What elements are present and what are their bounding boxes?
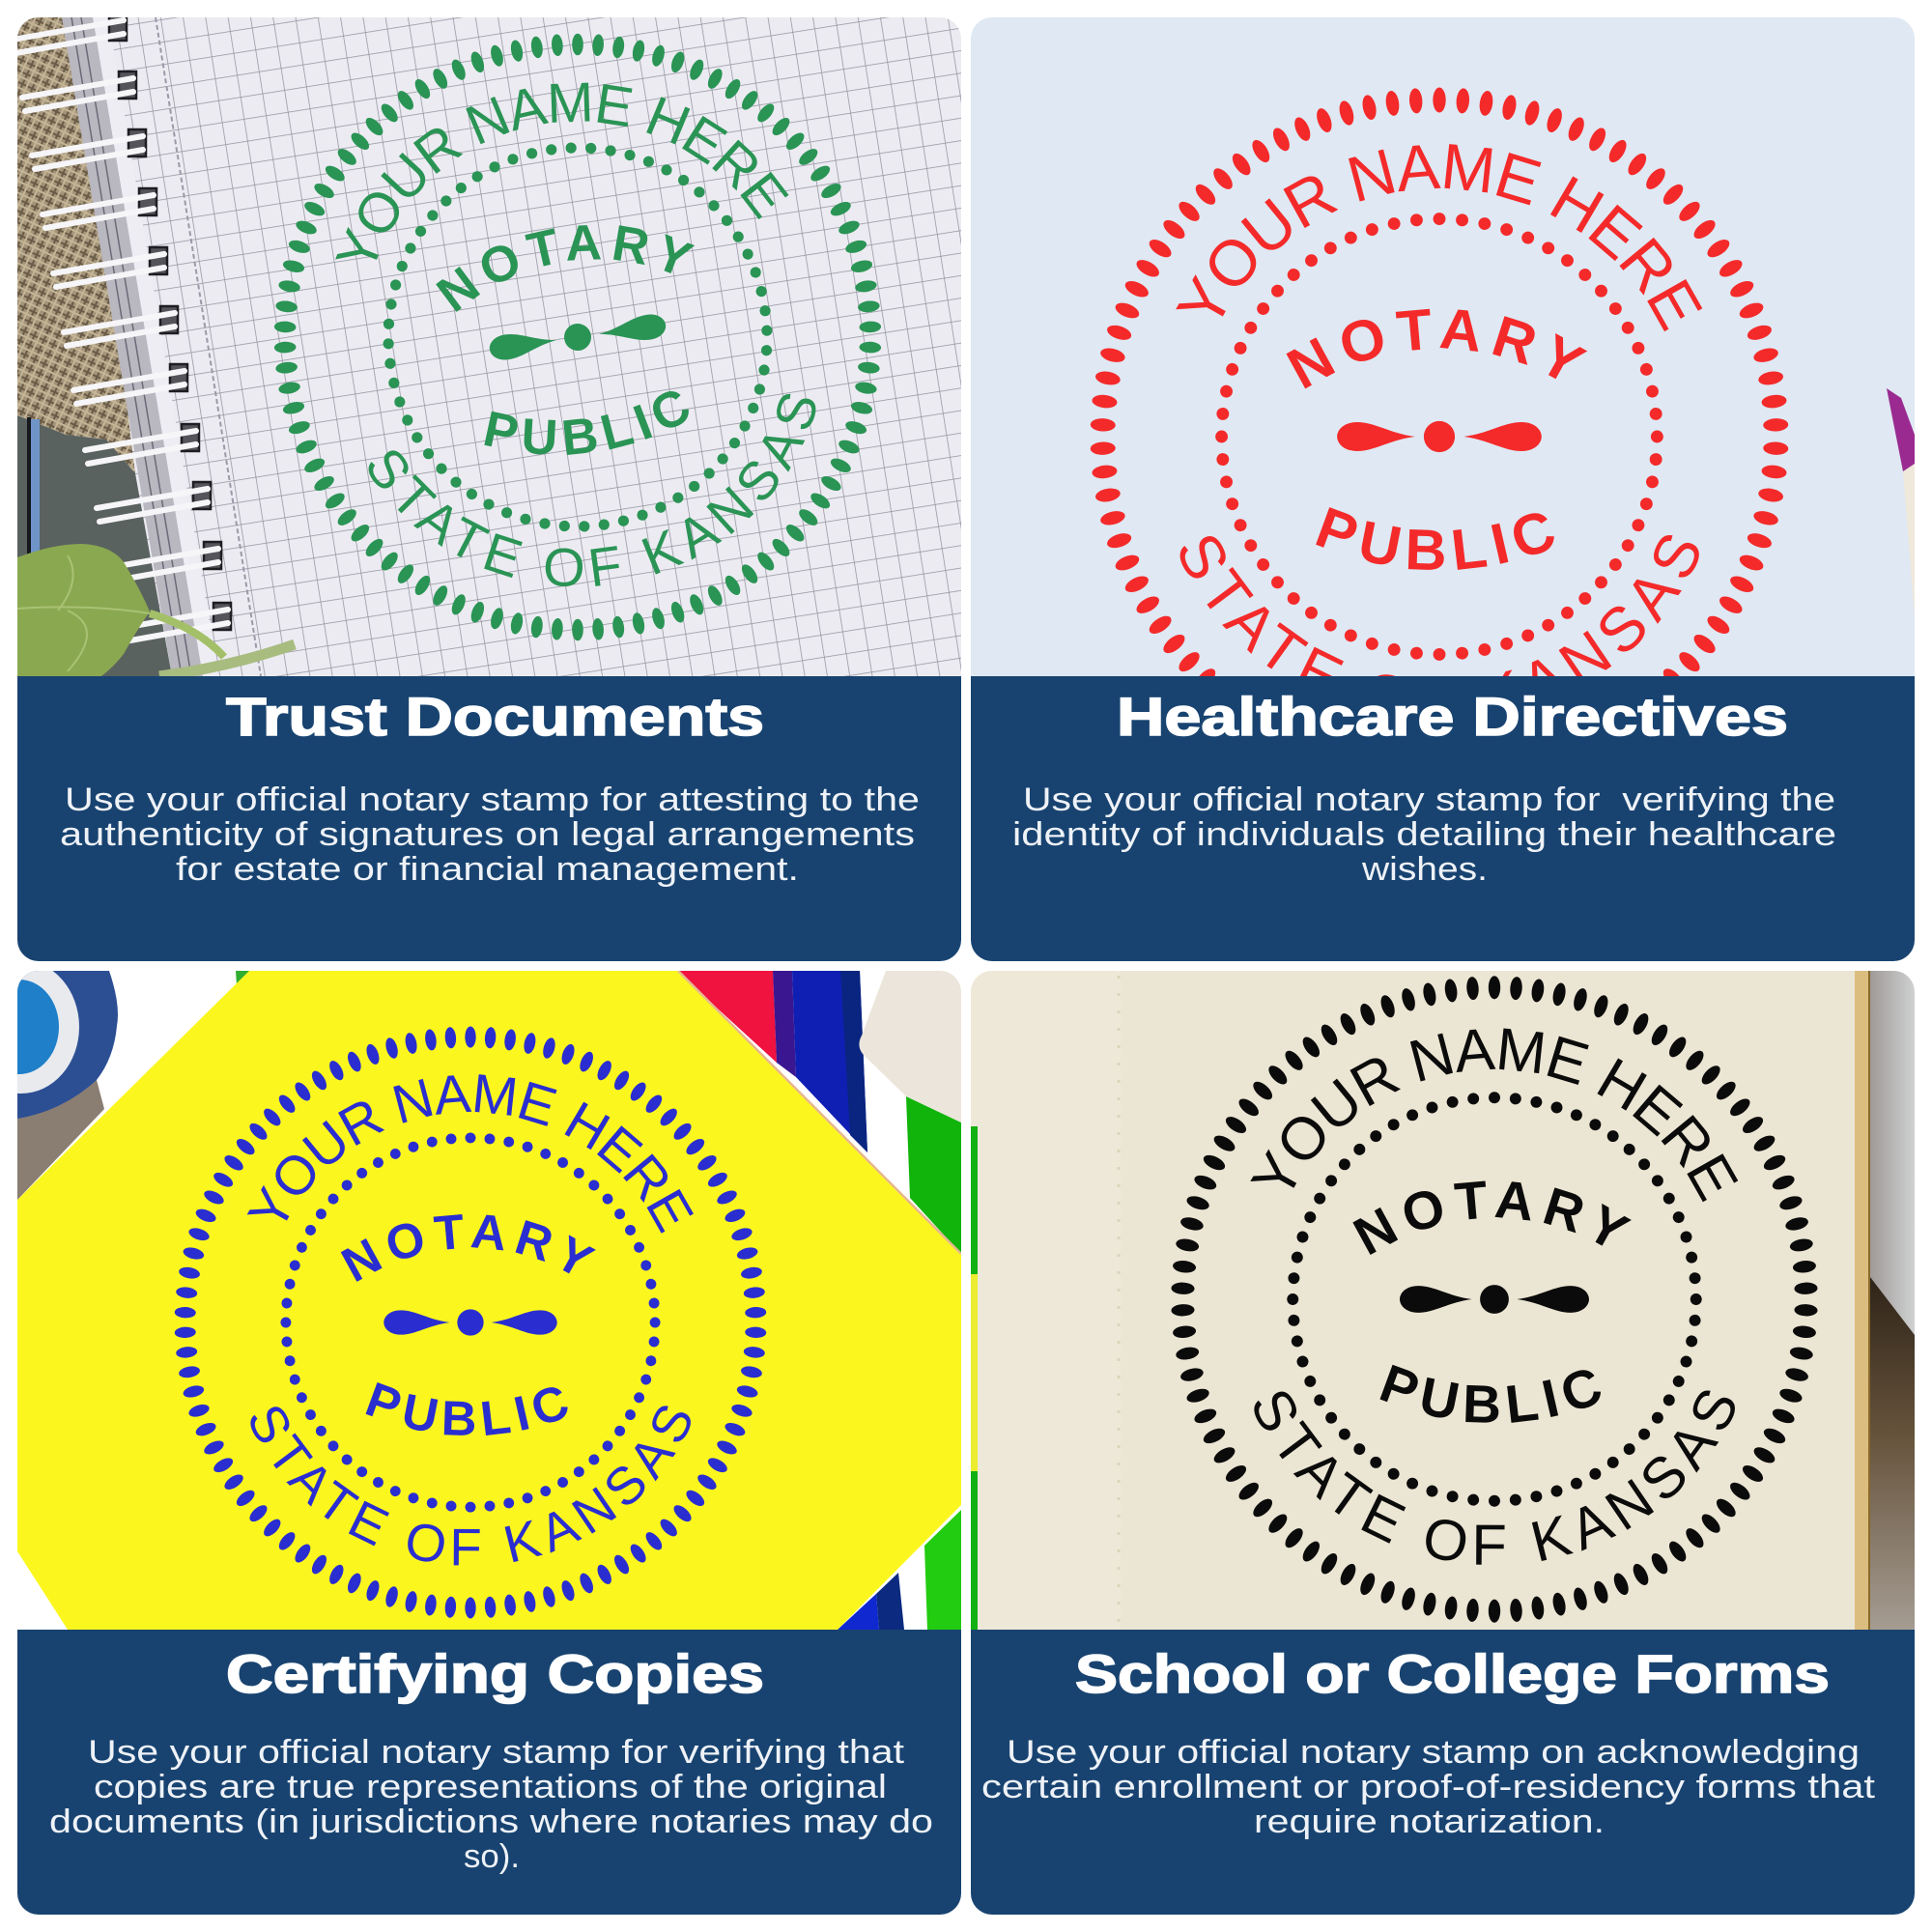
description text: identity of individuals detailing their healthcare (1012, 816, 1836, 853)
panel: Certifying Copies (17, 971, 961, 1915)
description text: copies are true representations of the original (94, 1769, 887, 1805)
description text (1014, 786, 1835, 881)
seal text: notary: NOTARY (1287, 309, 1588, 388)
stamp: blue notary seal (174, 1026, 767, 1619)
heading: Trust Documents (226, 686, 764, 747)
description text: so). (464, 1838, 520, 1875)
description text (981, 1734, 1876, 1840)
photo: spiral notebook on burlap with leaf (13, 14, 961, 676)
seal text: notary: NOTARY (340, 1214, 596, 1282)
seal text: state of kansas: STATE OF KANSAS (250, 1406, 691, 1565)
seal text: public: PUBLIC (484, 391, 689, 455)
seal text: public: PUBLIC (365, 1382, 568, 1435)
description text (49, 1734, 933, 1875)
description text: Use your official notary stamp on acknowledging (1007, 1734, 1860, 1771)
photo: yellow note among pens and scissors (0, 960, 961, 1630)
description text: Use your official notary stamp for verifying that (88, 1734, 905, 1771)
stamp: green notary seal (274, 33, 881, 641)
description text (60, 781, 920, 888)
seal text: your name here: YOUR NAME HERE (247, 1074, 694, 1234)
seal text: notary: NOTARY (1352, 1180, 1632, 1255)
caption background (971, 1630, 1915, 1915)
seal text: your name here: YOUR NAME HERE (1176, 144, 1702, 332)
seal text: state of kansas: STATE OF KANSAS (1180, 535, 1699, 676)
caption background (17, 1630, 961, 1915)
panel: School or College Forms (971, 971, 1915, 1915)
caption background (17, 676, 961, 961)
description text: Use your official notary stamp for verifying the (1023, 781, 1835, 818)
description text: Use your official notary stamp for attesting to the (65, 781, 920, 818)
description text: require notarization. (1254, 1804, 1605, 1840)
description text: for estate or financial management. (176, 851, 799, 888)
seal text: your name here: YOUR NAME HERE (335, 83, 788, 260)
stamp: red notary seal (1090, 87, 1789, 676)
seal text: your name here: YOUR NAME HERE (1250, 1028, 1739, 1202)
description text: wishes. (1361, 851, 1488, 888)
heading: School or College Forms (1075, 1643, 1830, 1704)
description text: certain enrollment or proof-of-residency forms that (981, 1769, 1876, 1805)
panel: Healthcare Directives (971, 17, 1915, 961)
caption background (971, 676, 1915, 961)
description text: documents (in jurisdictions where notaries may do (49, 1804, 933, 1840)
description text: authenticity of signatures on legal arrangements (60, 816, 915, 853)
seal text: notary: NOTARY (436, 225, 696, 312)
seal text: public: PUBLIC (1379, 1364, 1602, 1423)
heading: Certifying Copies (226, 1643, 764, 1704)
seal text: state of kansas: STATE OF KANSAS (369, 394, 815, 587)
seal text: state of kansas: STATE OF KANSAS (1254, 1391, 1735, 1565)
photo: pale blue paper with pencil tip (971, 17, 1915, 676)
heading: Healthcare Directives (1117, 686, 1788, 747)
photo: cream book page with fabric (971, 971, 1915, 1630)
seal text: public: PUBLIC (1316, 507, 1554, 570)
panel: Trust Documents (17, 17, 961, 961)
stamp: black notary seal (1171, 976, 1818, 1623)
